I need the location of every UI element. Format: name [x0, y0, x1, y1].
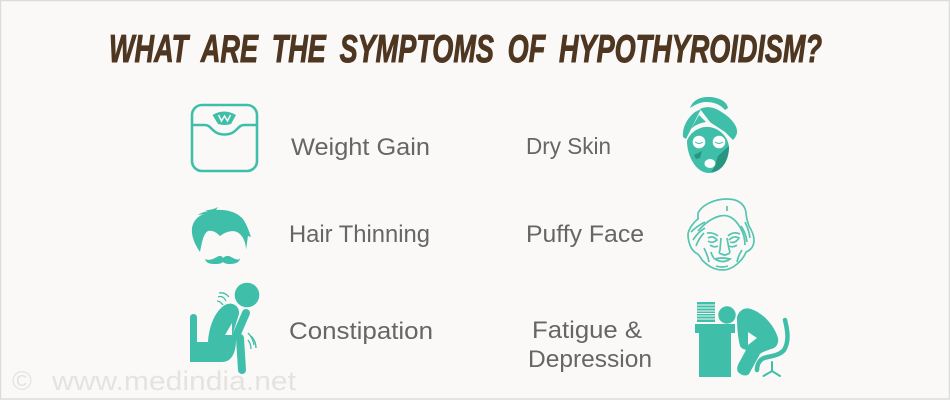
label: hair thinning: Hair Thinning [289, 221, 430, 248]
label: puffy face: Puffy Face [526, 221, 644, 248]
icon: elderly face [688, 199, 754, 270]
icon: tired person at desk [695, 302, 788, 377]
watermark: © [12, 366, 32, 396]
icon: face mask with towel [683, 97, 737, 173]
label: fatigue and depression: Fatigue & [532, 317, 642, 344]
label: fatigue and depression: Depression [528, 346, 652, 373]
label: constipation: Constipation [289, 318, 433, 345]
label: dry skin: Dry Skin [526, 133, 611, 159]
label: fatigue and depression [528, 317, 652, 373]
watermark: www.medindia.net [51, 366, 297, 396]
icon: hair and moustache [192, 207, 251, 264]
icon: weight scale [192, 105, 257, 171]
icon: constipation [190, 283, 259, 370]
label: weight gain: Weight Gain [291, 134, 430, 161]
